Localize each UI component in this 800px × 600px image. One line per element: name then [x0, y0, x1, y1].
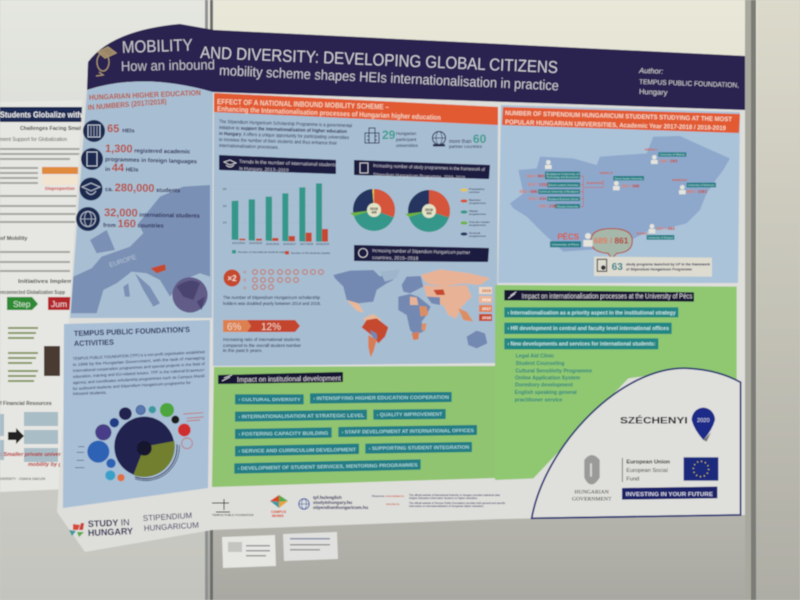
- panel: number of Stipendium Hungaricum students: [498, 105, 740, 283]
- title: MOBILITY: [121, 36, 193, 57]
- logo: Hungarian Government: GOVERNMENT: [572, 496, 612, 502]
- statistic: programmes: programmes in foreign languages: [105, 157, 197, 165]
- chart heading: study programmes: [354, 160, 490, 179]
- tag: curriculum development: [235, 444, 359, 456]
- tag: capacity building: › FOSTERING CAPACITY BUILDING: [238, 431, 328, 438]
- icon: building: [365, 128, 379, 143]
- tag: cultural diversity: › CULTURAL DIVERSITY: [238, 397, 301, 403]
- services list: Online Application System: [515, 375, 581, 381]
- callout: 63 study programmes: study programs launched by UP in the framework: [626, 263, 710, 267]
- university: Budapest group: 570 / 1019: [528, 182, 549, 187]
- logo: European Union: [622, 457, 718, 500]
- logo: Study in Hungary, Stipendium Hungaricum: STUDY IN: [88, 517, 130, 529]
- callout: 63 study programmes: of Stipendium Hungaricum Programme: [626, 268, 692, 272]
- doubled students icon row: [224, 270, 323, 292]
- sponsor block: white arc: [532, 368, 741, 518]
- tag: student integration: [365, 442, 472, 454]
- callout: 63 study programmes: 63: [612, 262, 623, 273]
- university: Budapest group: 316 / 434: [528, 196, 547, 201]
- background poster behind: ment Support for Globalization: [0, 137, 67, 143]
- arrow callout: 6% to 12%: [223, 320, 300, 333]
- text: scholarship holders doubled: holders was doubled yearly between 2014 and 2018.: [223, 301, 321, 306]
- panel: impact on institutional development: Impact on institutional development: [237, 374, 341, 384]
- background poster behind: : Smaller private univer: [0, 452, 62, 458]
- tag: cultural diversity: [235, 394, 304, 404]
- tag: quality improvement: › QUALITY IMPROVEMENT: [377, 412, 442, 418]
- icon: globe: [76, 207, 100, 231]
- logo: Campus Mundi: MUNDI: [272, 514, 283, 518]
- university: Debrecen: DEBRECEN: [672, 178, 687, 182]
- panel: effect of a national inbound mobility scheme: Increasing number of study programmes in the framework of: [373, 163, 486, 173]
- tag: student services: › DEVELOPMENT OF STUDENT SERVICES, MENTORING PROGRAMMES: [238, 463, 418, 472]
- map: Hungary with university labels: [510, 136, 730, 277]
- resources notes: [372, 493, 506, 508]
- statistic: HEIs: 65 HEIs: [107, 123, 135, 135]
- university: Budapest group: 146 / 236: [538, 204, 557, 209]
- university: Budapest group: 504 / 993: [527, 173, 545, 178]
- background poster behind: Disproportion: [45, 186, 75, 191]
- pie legend: Preparatory: [469, 187, 485, 191]
- university: Budapest group: Corvinus University of Budapest: [539, 191, 579, 194]
- logo: Tempus foundation scales: [212, 499, 254, 517]
- logo: Széchenyi 2020: 2020: [697, 418, 710, 424]
- pie legend: courses: [469, 190, 480, 194]
- tag: intensifying cooperation: [310, 392, 452, 404]
- text block: international cooperation programmes and special projects in the field of: [73, 361, 206, 373]
- subtitle: How an inbound: [121, 56, 215, 74]
- logo: Campus Mundi: [270, 495, 288, 518]
- bar chart x labels and legend: 2013/2014: [232, 241, 246, 245]
- logo: Campus Mundi: CAMPUS: [271, 510, 287, 514]
- title banner: Hungary: [639, 87, 668, 97]
- university: Szent István: [599, 170, 644, 190]
- text block: inbound students.: [73, 390, 107, 396]
- panel: effect of a national inbound mobility scheme: Trends in the number of international students: [239, 159, 337, 168]
- callout: 63 study programmes: [594, 257, 712, 277]
- map legend: 2016: [482, 297, 492, 302]
- background poster behind: Step: [13, 299, 31, 309]
- bar chart: 100: [223, 223, 227, 225]
- panel: Hungarian higher education in numbers: [70, 81, 213, 318]
- text block: for outbound students and Stipendium Hungaricum programme for: [73, 380, 192, 391]
- author block: Author:: [638, 66, 663, 76]
- university: Szent István: 320 / 366: [621, 184, 640, 189]
- intro text: internationalisation processes.: [219, 143, 279, 151]
- panel: number of Stipendium Hungaricum students: NUMBER OF STIPENDIUM HUNGARICUM STUDENTS STUDYING AT THE MOST: [505, 110, 732, 123]
- chart heading: partner countries: [354, 245, 489, 262]
- services list: practitioner service: [515, 397, 562, 403]
- pie chart 2018/2019: [405, 190, 450, 232]
- icon: institutions: [83, 120, 105, 142]
- resources notes: information on internationalisation of Hungarian higher education.: [409, 504, 484, 508]
- university: Miskolc: [645, 148, 686, 164]
- callout: University of Pécs: University of Pécs: [552, 243, 580, 247]
- tag: student integration: › SUPPORTING STUDENT INTEGRATION: [369, 445, 470, 452]
- business cards below poster: [222, 532, 338, 568]
- map legend: 2015: [482, 288, 492, 293]
- panel: effect of a national inbound mobility scheme: Enhancing the Internationalisation processes of Hungarian higher education: [217, 104, 441, 122]
- doubled students icon row: =: [243, 278, 247, 284]
- logo: Széchenyi 2020: [620, 408, 715, 442]
- intro text: [219, 119, 352, 151]
- bar chart x labels and legend: 2015/2016: [266, 242, 280, 246]
- tag: strategic level: › INTERNATIONALISATION AT STRATEGIC LEVEL: [238, 413, 364, 420]
- services list: Legal Aid Clinic: [516, 354, 554, 360]
- bar chart x labels and legend: [232, 241, 330, 255]
- bar chart: 300: [223, 189, 227, 191]
- logo: Hungarian Government: HUNGARIAN: [575, 489, 609, 495]
- tag: priority aspect: [504, 307, 678, 317]
- university: Budapest group: [519, 160, 603, 209]
- logo: Study in Hungary, Stipendium Hungaricum: [69, 511, 199, 538]
- logo: European Union: Fund: [626, 476, 639, 482]
- bar chart x labels and legend: 2014/2015: [249, 241, 263, 245]
- pie legend: Doctoral: [469, 231, 481, 235]
- panel: impact on internationalisation at University of Pécs: Impact on internationalisation processes at the University of Pécs: [522, 292, 693, 301]
- icon: globe with people: [432, 132, 446, 146]
- statistic: programmes: [105, 143, 197, 175]
- background poster behind: mobility by g: [28, 462, 63, 468]
- logo: Study in Hungary, Stipendium Hungaricum: HUNGARY: [88, 526, 133, 538]
- text: international ratio: [223, 337, 301, 353]
- university: Szent István: GÖDÖLLŐ: [599, 170, 613, 175]
- statistic: programmes: 1,300 registered academic: [105, 143, 191, 157]
- background poster behind: IVERSITY · OSAKA GAKUIN: [0, 477, 46, 481]
- title banner: mobility scheme shapes HEIs internationalisation in practice: [219, 62, 559, 93]
- bar chart x labels and legend: 2016/2017: [283, 242, 297, 246]
- bar chart x labels and legend: Number of SH students (capita): [291, 251, 330, 255]
- panel: Tempus Public Foundation's activities: [63, 320, 210, 538]
- text: international ratio: Increasing ratio of international students: [223, 337, 301, 342]
- logo: Study in Hungary, Stipendium Hungaricum: STIPENDIUM: [143, 511, 193, 523]
- statistic: programmes: in 44 HEIs: [105, 162, 139, 175]
- logo: Széchenyi 2020: SZÉCHENYI: [620, 414, 688, 425]
- statistic: students: ca. 280,000 students: [105, 182, 180, 195]
- map legend: 2017: [482, 306, 492, 311]
- tag: priority aspect: › Internationalisation as a priority aspect in the institutional strategy: [507, 310, 676, 316]
- icon: programmes: [81, 148, 103, 170]
- statistic: international students: from 160 countries: [103, 218, 164, 231]
- map: Europe: EUROPE: [108, 254, 138, 269]
- orange header: [502, 107, 740, 133]
- tag: new developments: [504, 338, 658, 349]
- bar chart x labels and legend: Number of international students (capita): [238, 250, 289, 254]
- doubled students icon row: =: [243, 270, 247, 276]
- map legend: [479, 287, 492, 321]
- resources notes: Resources: www.oktatas.hu: [372, 494, 405, 498]
- university: Debrecen: University of Debrecen: [688, 184, 715, 187]
- tag: quality improvement: [373, 409, 446, 420]
- panel: effect of a national inbound mobility scheme: Increasing number of Stipendium Hungaricum partner: [372, 248, 470, 256]
- background poster behind: Jum: [51, 299, 67, 309]
- services list: Dormitory development: [515, 383, 573, 389]
- intro text: in Hungary; it offers a unique opportunity for participating universities: [219, 131, 350, 141]
- panel: effect of a national inbound mobility scheme: EFFECT OF A NATIONAL INBOUND MOBILITY SCHEME –: [217, 97, 389, 111]
- text: scholarship holders doubled: [223, 295, 321, 306]
- banner heading: [504, 290, 694, 302]
- resources notes: The official website of Educational Authority in Hungary provides statistical data: [409, 493, 500, 497]
- pie chart 2018/2019: 2018/: [425, 208, 433, 212]
- university: Szeged: University of Szeged: [648, 236, 674, 239]
- background poster behind: Initiatives Implem: [18, 279, 73, 285]
- panel: effect of a national inbound mobility scheme: partner countries: [449, 144, 483, 149]
- bar chart: 200: [223, 206, 227, 208]
- arrow callout: 6% to 12%: 12%: [261, 322, 281, 333]
- pie legend: [460, 187, 490, 238]
- callout: University of Pécs: [550, 229, 632, 259]
- services list: Student Counseling: [516, 361, 564, 367]
- intro text: The Stipendium Hungaricum Scholarship Programme is a governmental: [219, 119, 352, 129]
- resources notes: The official website of Tempus Public Foundation provides both general and specific: [409, 501, 506, 505]
- pie legend: programmes: [469, 223, 486, 227]
- icon: web globe and links: stipendiumhungaricum.hu: [313, 505, 368, 510]
- tag: capacity building: [235, 427, 332, 439]
- panel: impact on internationalisation at University of Pécs: [495, 285, 741, 518]
- bar chart x labels and legend: 2017/2018: [300, 242, 314, 246]
- statistic: 60 countries: more than 60: [449, 132, 487, 146]
- university: Szent István: Szent István University: [615, 177, 643, 180]
- chart heading: trends: [219, 155, 336, 174]
- pie legend: programmes: [469, 201, 486, 205]
- panel: effect of a national inbound mobility scheme: countries, 2015–2018: [372, 255, 419, 262]
- background poster behind: Students Globalize with: [0, 110, 82, 120]
- bar chart x labels and legend: 2018/2019: [316, 242, 330, 246]
- panel: effect of a national inbound mobility scheme: [213, 93, 498, 366]
- tag: new developments: › New developments and services for international students:: [507, 342, 656, 348]
- tag: staff development: [338, 425, 477, 437]
- icon: web globe and links: tpf.hu/english: [313, 495, 342, 500]
- panel: Hungarian higher education in numbers: IN NUMBERS (2017/2018): [87, 97, 167, 112]
- university: Szeged: SZEGED: [636, 231, 647, 235]
- title banner: [87, 24, 745, 110]
- background poster behind: reconnected Globalization Supp: [0, 290, 65, 296]
- tag: student services: [234, 459, 421, 474]
- pie legend: Bachelor: [469, 198, 481, 202]
- icon: graduation cap on globe: [96, 47, 116, 76]
- services list: Cultural Sensitivity Programme: [515, 368, 592, 374]
- callout: University of Pécs: 689 / 861: [594, 236, 629, 246]
- university: Budapest group: Budapest University of: [546, 173, 579, 176]
- panel: effect of a national inbound mobility scheme: participant: [396, 137, 417, 142]
- text block: in 1996 by the Hungarian Government, with the task of managing: [73, 355, 205, 367]
- doubled students icon row: ×2: [227, 274, 237, 283]
- banner heading: [218, 372, 343, 384]
- university: Miskolc: MISKOLC: [645, 148, 657, 152]
- background poster behind: Challenges Facing Small: [20, 126, 82, 132]
- university: Debrecen: 889 / 1081: [687, 189, 708, 194]
- pie chart 2018/2019: 509: [426, 211, 432, 215]
- callout: University of Pécs: PÉCS: [557, 232, 580, 241]
- text block: education, training and EU-related issues. TPF is the national Erasmus+: [73, 367, 206, 379]
- intro text: initiative to support the internationalisation of higher education: [219, 125, 347, 135]
- pie legend: programmes: [469, 212, 486, 216]
- background poster behind: of Mobility: [0, 236, 28, 242]
- icon: web globe and links: studyinhungary.hu: [313, 500, 353, 505]
- university: Budapest group: Technology and Economics: [546, 176, 580, 179]
- footer strip: logos and resources: [212, 493, 506, 518]
- intro text: to increase the number of their students and thus enhance their: [219, 137, 337, 147]
- logo: Study in Hungary, Stipendium Hungaricum: HUNGARICUM: [144, 521, 199, 533]
- university: Szeged: 597 / 493: [657, 226, 675, 231]
- text: international ratio: compared to the overall student number: [223, 343, 301, 348]
- statistic: international students: 32,000 international students: [104, 207, 200, 221]
- title banner: AND DIVERSITY: DEVELOPING GLOBAL CITIZENS: [200, 43, 558, 77]
- diagram: activities circles: [75, 403, 203, 481]
- heading: HUNGARIAN HIGHER EDUCATION: [89, 88, 201, 102]
- panel: effect of a national inbound mobility scheme: universities: [396, 143, 419, 148]
- poster paper sheet: [57, 90, 745, 552]
- text block: [73, 349, 206, 396]
- university: Debrecen: [672, 178, 716, 194]
- tag: staff development: › STAFF DEVELOPMENT AT INTERNATIONAL OFFICES: [342, 428, 475, 436]
- panel: effect of a national inbound mobility scheme: in Hungary, 2013–2019: [239, 166, 289, 174]
- pie chart 2016/2017: [350, 189, 395, 231]
- statistic: 29 universities: 29: [382, 128, 396, 142]
- teal tags list: [234, 392, 477, 474]
- text block: TEMPUS PUBLIC FOUNDATION (TPF) is a non-profit organisation established: [73, 349, 205, 361]
- tag: curriculum development: › SERVICE AND CURRICULUM DEVELOPMENT: [238, 447, 356, 455]
- university: Miskolc: University of Miskolc: [660, 154, 686, 157]
- university: Budapest group: Óbuda University: [557, 205, 579, 208]
- university: Szeged: [636, 224, 675, 240]
- university: Budapest group: BUDAPEST: [587, 181, 603, 185]
- panel: number of Stipendium Hungaricum students: POPULAR HUNGARIAN UNIVERSITIES, Academic Year 2017-2018 / 2018-2019: [505, 119, 726, 132]
- panel: effect of a national inbound mobility scheme: Hungarian: [396, 131, 417, 136]
- text: scholarship holders doubled: The number of Stipendium Hungaricum scholarship: [223, 295, 320, 300]
- background poster behind: f Financial Resources: [0, 401, 52, 407]
- university: Budapest group: Budapest Business School: [548, 198, 579, 201]
- tag: intensifying cooperation: › INTENSIFYING HIGHER EDUCATION COOPERATION: [313, 395, 449, 402]
- university: Budapest group: 554 / 486: [519, 189, 538, 194]
- icon: student cap: [80, 178, 102, 200]
- university: Budapest group: Eötvös Loránd University: [548, 184, 579, 187]
- resources notes: (Higher Education Information System) on higher education.: [409, 496, 478, 500]
- resources notes: www.tka.hu: [386, 502, 400, 506]
- bar chart: [223, 183, 328, 242]
- services list: [515, 354, 592, 403]
- pie legend: programmes: [469, 234, 486, 238]
- logo: European Union: European Union: [626, 460, 671, 466]
- logo: Tempus foundation scales: TEMPUS PUBLIC FOUNDATION: [212, 513, 254, 517]
- pie chart 2016/2017: 2016/: [370, 207, 378, 211]
- statistic: international students: [103, 207, 200, 231]
- icon: web globe and links: [299, 495, 368, 510]
- tag: HR development: [504, 323, 672, 334]
- panel: impact on institutional development: [212, 366, 495, 487]
- title banner: TEMPUS PUBLIC FOUNDATION,: [639, 79, 739, 89]
- background poster behind: [0, 100, 90, 492]
- text: international ratio: in the past 5 years.: [223, 348, 263, 353]
- text block: agency, and coordinates scholarship programmes such as Campus Mundi: [73, 373, 205, 385]
- panel: Tempus Public Foundation's activities: ACTIVITIES: [74, 338, 114, 348]
- services list: English speaking general: [515, 390, 577, 396]
- logo: European Union: INVESTING IN YOUR FUTURE: [626, 492, 713, 498]
- map legend: 2018: [482, 315, 492, 320]
- pie legend: One-tier master: [469, 220, 490, 224]
- pie legend: Master: [469, 209, 478, 213]
- pie chart 2016/2017: 435: [371, 210, 377, 214]
- logo: European Union: European Social: [626, 468, 668, 474]
- doubled students icon row: =: [243, 286, 247, 292]
- world map: [333, 269, 490, 357]
- tag: HR development: › HR development in central and faculty level international offices: [507, 326, 669, 332]
- university: Miskolc: 230 / 263: [659, 159, 678, 164]
- logo: Hungarian Government: [572, 455, 612, 502]
- arrow callout: 6% to 12%: 6%: [227, 322, 242, 333]
- heading: TEMPUS PUBLIC FOUNDATION'S: [74, 325, 190, 338]
- orange header: [214, 93, 498, 125]
- map: Europe: [71, 185, 210, 313]
- tag: strategic level: [235, 410, 367, 422]
- panel: effect of a national inbound mobility scheme: Stipendium Hungaricum Programme, 2016–2019: [373, 172, 465, 181]
